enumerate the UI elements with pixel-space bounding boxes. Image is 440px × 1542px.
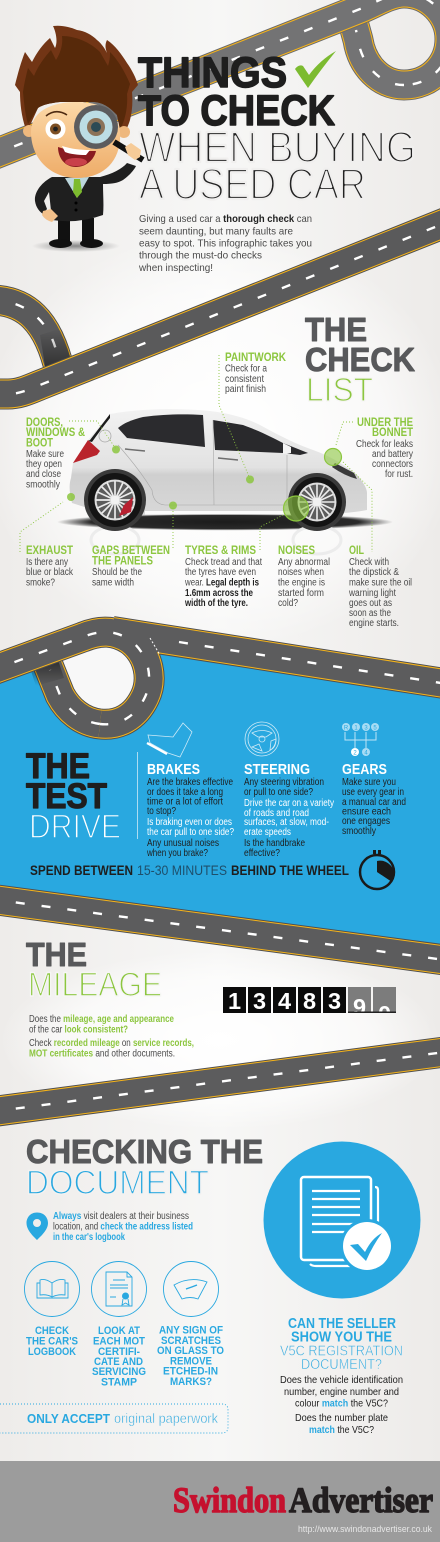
- callout: only accept original paperwork: original paperwork: [114, 1411, 218, 1426]
- column: steering: effective?: [244, 848, 280, 859]
- column: steering: of roads and road: [244, 808, 309, 819]
- heading: the test drive: TEST: [26, 777, 107, 816]
- mileage text: Does the mileage, age and appearance: [29, 1014, 174, 1025]
- footer logo and URL: Swindon: [173, 1480, 286, 1520]
- odometer: [223, 987, 396, 1013]
- label: check logbook: CHECK: [35, 1325, 69, 1337]
- checklist item: paintwork: paint finish: [225, 384, 266, 395]
- icon: gear stick pattern: 2: [353, 750, 357, 756]
- icon: certificate: [92, 1262, 146, 1316]
- label: MOT certificate: EACH MOT: [93, 1336, 145, 1348]
- text: can the seller show you the V5C: DOCUMENT?: [301, 1356, 382, 1373]
- checklist item: doors: [26, 415, 85, 490]
- text: can the seller show you the V5C: match the V5C?: [309, 1424, 374, 1436]
- checklist item: exhaust: EXHAUST: [26, 543, 74, 557]
- heading: the mileage: MILEAGE: [28, 966, 162, 1004]
- title: A USED CAR: [139, 161, 366, 209]
- checklist item: gaps: Should be the: [92, 567, 142, 578]
- checklist item: exhaust: [26, 543, 74, 588]
- checklist item: noises: Any abnormal: [278, 557, 330, 568]
- label: glass scratches: REMOVE: [170, 1356, 212, 1368]
- icon: windscreen: [164, 1262, 218, 1316]
- heading: the check list: [305, 311, 415, 409]
- column: gears: Make sure you: [342, 777, 396, 788]
- checklist item: doors: BOOT: [26, 436, 54, 450]
- label: check logbook: [26, 1325, 78, 1358]
- label: glass scratches: MARKS?: [170, 1376, 212, 1388]
- label: MOT certificate: CATE AND: [94, 1356, 143, 1368]
- text: can the seller show you the V5C: V5C REGISTRATION: [280, 1342, 403, 1360]
- odometer: 1: [228, 988, 241, 1014]
- checklist item: paintwork: consistent: [225, 374, 264, 385]
- dealer advice text: in the car's logbook: [53, 1232, 125, 1243]
- checklist item: oil: engine starts.: [349, 618, 399, 629]
- column: steering: surfaces, at slow, mod-: [244, 817, 329, 828]
- checklist item: exhaust: smoke?: [26, 578, 55, 588]
- intro text: easy to spot. This infographic takes you: [139, 238, 312, 250]
- label: check logbook: LOGBOOK: [28, 1346, 76, 1358]
- column: brakes: [146, 761, 234, 859]
- callout: time behind the wheel: [30, 863, 349, 878]
- checklist item: tyres: wear. Legal depth is: [184, 578, 259, 588]
- label: MOT certificate: CERTIFI-: [98, 1346, 140, 1358]
- label: glass scratches: ETCHED-IN: [163, 1366, 218, 1378]
- heading: the test drive: [26, 747, 121, 846]
- heading: the mileage: [26, 936, 162, 1004]
- checklist item: under the bonnet: UNDER THE: [357, 415, 413, 429]
- column: brakes: Any unusual noises: [147, 838, 219, 849]
- icon: V5C document in blue circle: [264, 1142, 420, 1298]
- label: glass scratches: [157, 1324, 224, 1388]
- odometer: 9: [353, 994, 366, 1020]
- column: steering: or pull to one side?: [244, 787, 313, 798]
- road: second diagonal with left loop: [0, 217, 440, 394]
- callout: time behind the wheel: 15-30 MINUTES: [137, 863, 227, 878]
- column: brakes: BRAKES: [147, 761, 200, 778]
- road: third with round loop: [0, 631, 440, 724]
- title: THINGS: [138, 49, 287, 97]
- column: steering: Drive the car on a variety: [244, 798, 334, 809]
- odometer: 8: [303, 988, 316, 1014]
- heading: the check list: LIST: [306, 372, 373, 409]
- column: brakes: Is braking even or does: [147, 817, 232, 828]
- text: can the seller show you the V5C: [280, 1316, 403, 1436]
- checklist item: tyres: Check tread and that: [185, 557, 262, 568]
- checklist item: doors: and close: [26, 469, 61, 480]
- checklist item: oil: Check with: [349, 557, 389, 568]
- checklist item: exhaust: blue or black: [26, 567, 74, 578]
- panel: test drive blue background: [0, 645, 440, 950]
- checklist item: oil: warning light: [348, 588, 396, 599]
- dealer advice text: location, and check the address listed: [53, 1222, 193, 1232]
- road: fifth under mileage: [0, 1050, 440, 1112]
- car shadow and reflection: [57, 514, 393, 554]
- checklist item: under the bonnet: BONNET: [372, 425, 414, 439]
- checklist item: noises: the engine is: [278, 578, 325, 588]
- icon: steering wheel: [245, 722, 279, 756]
- checklist item: under the bonnet: Check for leaks: [356, 439, 413, 450]
- checklist item: tyres: [184, 543, 262, 609]
- column: steering: STEERING: [244, 761, 310, 778]
- checklist item: gaps: GAPS BETWEEN: [92, 543, 170, 557]
- road: top loop: [0, 0, 440, 156]
- checklist item: noises: NOISES: [278, 543, 315, 557]
- character with magnifying glass: [15, 26, 143, 252]
- column: brakes: when you brake?: [146, 848, 208, 859]
- intro text: Giving a used car a thorough check can: [139, 213, 312, 225]
- icon: gear stick pattern: 1: [354, 726, 358, 732]
- label: check logbook: THE CAR'S: [26, 1336, 78, 1348]
- checklist item: tyres: the tyres have even: [185, 567, 256, 578]
- checklist item: oil: [348, 543, 412, 629]
- footer logo and URL: [173, 1480, 433, 1535]
- icon: gear stick pattern: 3: [364, 726, 368, 732]
- callout: only accept original paperwork: ONLY ACCEPT: [27, 1411, 110, 1426]
- text: can the seller show you the V5C: colour match the V5C?: [295, 1398, 388, 1410]
- icon: stopwatch: [360, 850, 394, 889]
- column: brakes: Are the brakes effective: [147, 777, 233, 788]
- checklist item: under the bonnet: for rust.: [385, 469, 413, 480]
- checklist item: paintwork: PAINTWORK: [225, 350, 286, 364]
- icon: boot on pedal: [147, 723, 192, 757]
- mileage text: Check recorded mileage on service records,: [29, 1038, 194, 1049]
- checklist item: doors: DOORS,: [26, 415, 63, 429]
- callout: only accept original paperwork: [0, 1404, 228, 1433]
- intro text: seem daunting, but many faults are: [139, 226, 293, 238]
- odometer: 3: [253, 988, 266, 1014]
- heading: checking the document: CHECKING THE: [26, 1134, 263, 1171]
- dealer advice text: [53, 1211, 193, 1243]
- column: gears: smoothly: [342, 826, 376, 837]
- heading: the test drive: DRIVE: [29, 808, 121, 846]
- title: [138, 49, 416, 209]
- checklist item: oil: the dipstick &: [349, 567, 399, 578]
- heading: the mileage: THE: [26, 936, 87, 973]
- column: gears: a manual car and: [342, 797, 406, 808]
- checklist item: oil: make sure the oil: [349, 578, 412, 588]
- road: fourth under test drive: [0, 899, 440, 962]
- intro text: through the must-do checks: [139, 250, 262, 262]
- checklist item: under the bonnet: and battery: [372, 449, 413, 460]
- column: steering: [244, 761, 334, 859]
- column: steering: erate speeds: [244, 827, 291, 838]
- checklist item: under the bonnet: [356, 415, 414, 480]
- checklist item: noises: [278, 543, 330, 609]
- column: gears: [342, 761, 406, 837]
- title: TO CHECK: [138, 87, 335, 135]
- heading: the check list: THE: [305, 311, 367, 348]
- car illustration: [70, 409, 367, 531]
- checklist item: gaps: same width: [92, 578, 134, 588]
- heading: checking the document: [26, 1134, 263, 1202]
- text: can the seller show you the V5C: Does the vehicle identification: [280, 1374, 403, 1386]
- icon: gear stick pattern: 5: [373, 726, 377, 732]
- checklist item: oil: OIL: [349, 543, 364, 557]
- checklist item: doors: Make sure: [26, 449, 64, 460]
- heading: the test drive: THE: [26, 747, 90, 786]
- odometer: 3: [328, 988, 341, 1014]
- intro text: when inspecting!: [138, 262, 213, 274]
- column: brakes: or does it take a long: [147, 787, 223, 798]
- column: gears: use every gear in: [342, 787, 404, 798]
- column: steering: Is the handbrake: [244, 838, 305, 849]
- checklist item: noises: cold?: [278, 598, 298, 609]
- label: glass scratches: SCRATCHES: [161, 1335, 221, 1347]
- icon: gear stick pattern: [342, 723, 379, 756]
- column: steering: Any steering vibration: [244, 777, 324, 788]
- check points and connectors: [20, 355, 372, 552]
- checklist item: doors: WINDOWS &: [26, 425, 85, 439]
- dealer advice text: Always visit dealers at their business: [53, 1211, 189, 1222]
- column: gears: GEARS: [342, 761, 387, 778]
- intro text: [138, 213, 312, 274]
- label: MOT certificate: [92, 1325, 146, 1388]
- mileage text: [29, 1014, 194, 1060]
- text: can the seller show you the V5C: CAN THE SELLER: [288, 1316, 396, 1332]
- icon: logbook: [24, 1262, 80, 1316]
- checklist item: tyres: 1.6mm across the: [185, 588, 253, 599]
- checklist item: oil: goes out as: [349, 598, 392, 609]
- checklist item: paintwork: Check for a: [225, 364, 267, 374]
- heading: checking the document: DOCUMENT: [26, 1164, 209, 1202]
- icon: location pin: [26, 1212, 48, 1240]
- label: glass scratches: ANY SIGN OF: [159, 1324, 223, 1336]
- text: can the seller show you the V5C: SHOW YOU THE: [291, 1330, 392, 1346]
- column: gears: one engages: [342, 816, 390, 827]
- icon: gear stick pattern: R: [344, 726, 349, 732]
- icon: green tick: [295, 51, 336, 88]
- checklist item: under the bonnet: connectors: [372, 459, 413, 470]
- checklist item: oil: soon as the: [349, 608, 391, 619]
- column: brakes: to stop?: [147, 806, 176, 817]
- text: can the seller show you the V5C: number, engine number and: [284, 1386, 399, 1398]
- checklist item: doors: they open: [26, 459, 62, 470]
- checklist item: gaps: [92, 543, 170, 588]
- label: glass scratches: ON GLASS TO: [157, 1345, 224, 1357]
- checklist item: paintwork: [225, 350, 286, 395]
- column: brakes: time or a lot of effort: [147, 796, 223, 808]
- checklist item: doors: smoothly: [26, 480, 60, 490]
- checklist item: gaps: THE PANELS: [92, 554, 153, 568]
- mileage text: MOT certificates and other documents.: [29, 1048, 175, 1060]
- checklist item: noises: noises when: [278, 567, 324, 578]
- column: brakes: the car pull to one side?: [147, 827, 234, 838]
- label: MOT certificate: SERVICING: [92, 1366, 146, 1378]
- footer band: [0, 1461, 440, 1542]
- odometer: 0: [378, 1001, 391, 1027]
- callout: time behind the wheel: BEHIND THE WHEEL: [231, 863, 349, 878]
- checklist item: noises: started form: [278, 588, 324, 599]
- callout: time behind the wheel: SPEND BETWEEN: [30, 863, 133, 878]
- odometer: 4: [278, 988, 291, 1014]
- checklist item: exhaust: Is there any: [26, 557, 68, 568]
- icon: gear stick pattern: 4: [364, 750, 368, 756]
- column: gears: ensure each: [342, 806, 391, 818]
- checklist item: tyres: TYRES & RIMS: [185, 543, 256, 557]
- mileage text: of the car look consistent?: [29, 1024, 128, 1036]
- label: MOT certificate: LOOK AT: [98, 1325, 140, 1337]
- text: can the seller show you the V5C: Does the number plate: [295, 1412, 388, 1424]
- checklist item: tyres: width of the tyre.: [184, 598, 248, 609]
- heading: the check list: CHECK: [305, 341, 415, 378]
- label: MOT certificate: STAMP: [101, 1376, 137, 1388]
